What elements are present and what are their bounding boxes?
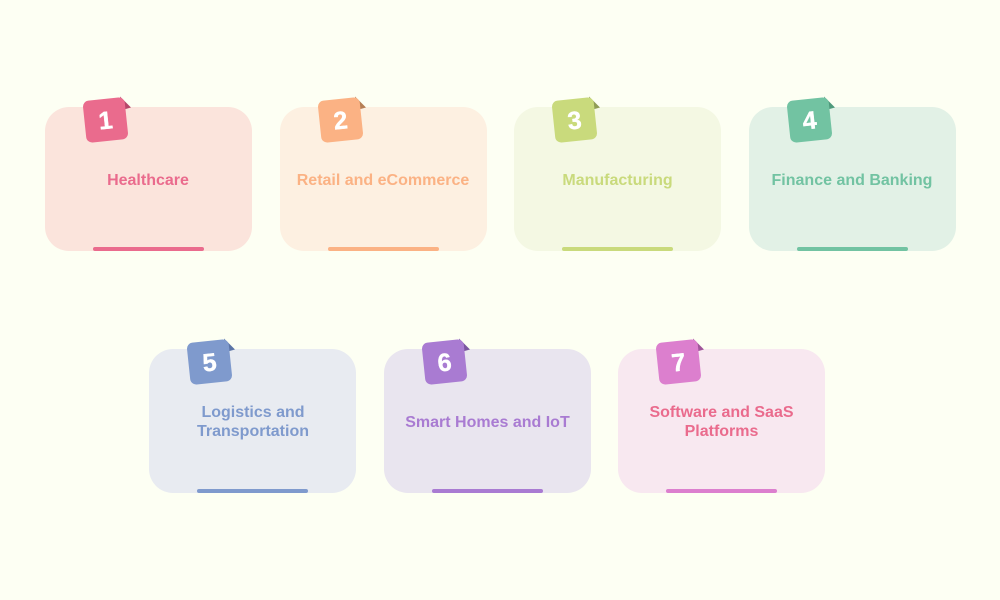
icon: fold 4: [824, 96, 835, 110]
badge 7: 7: [670, 348, 687, 378]
label: Smart Homes and IoT: Smart Homes and IoT: [405, 414, 570, 431]
bar: Manufacturing accent: [562, 247, 673, 251]
bar: Smart Homes accent: [432, 489, 543, 493]
badge 4: [786, 97, 833, 143]
bar: Retail accent: [328, 247, 439, 251]
bar: Logistics accent: [197, 489, 308, 493]
badge 3: [551, 97, 598, 143]
badge 6: 6: [436, 348, 453, 378]
badge 7: [655, 339, 702, 385]
icon: fold 1: [120, 96, 131, 110]
badge 1: [82, 97, 129, 143]
icon: fold 5: [224, 338, 235, 352]
badge 6: [421, 339, 468, 385]
badge 4: 4: [801, 106, 818, 136]
icon: fold 6: [459, 338, 470, 352]
badge 2: [317, 97, 364, 143]
label: Finance and Banking: Finance and Banking: [772, 172, 932, 189]
icon: fold 2: [355, 96, 366, 110]
bar: Finance accent: [797, 247, 908, 251]
label: Retail and eCommerce: Retail and eCommerce: [297, 172, 469, 189]
icon: fold 7: [693, 338, 704, 352]
panel: Logistics and Transportation: [149, 338, 356, 493]
label: Software and SaaS Platforms: Software and SaaS: [649, 404, 794, 421]
label: Healthcare: Healthcare: [107, 172, 189, 189]
panel: Software and SaaS Platforms: [618, 338, 825, 493]
badge 3: 3: [566, 106, 583, 136]
badge 5: 5: [201, 348, 218, 378]
badge 2: 2: [332, 106, 349, 136]
label: Software and SaaS Platforms: Platforms: [685, 423, 758, 440]
panel: Healthcare: [45, 96, 252, 251]
label: Logistics and Transportation: Logistics and: [201, 404, 305, 421]
icon: fold 3: [589, 96, 600, 110]
badge 1: 1: [97, 106, 114, 136]
panel: Manufacturing: [514, 96, 721, 251]
panel: Smart Homes and IoT: [384, 338, 591, 493]
label: Logistics and Transportation: Transportation: [197, 423, 309, 440]
badge 5: [186, 339, 233, 385]
panel: Finance and Banking: [749, 96, 956, 251]
bar: Healthcare accent: [93, 247, 204, 251]
bar: Software accent: [666, 489, 777, 493]
label: Manufacturing: Manufacturing: [562, 172, 673, 189]
panel: Retail and eCommerce: [280, 96, 487, 251]
